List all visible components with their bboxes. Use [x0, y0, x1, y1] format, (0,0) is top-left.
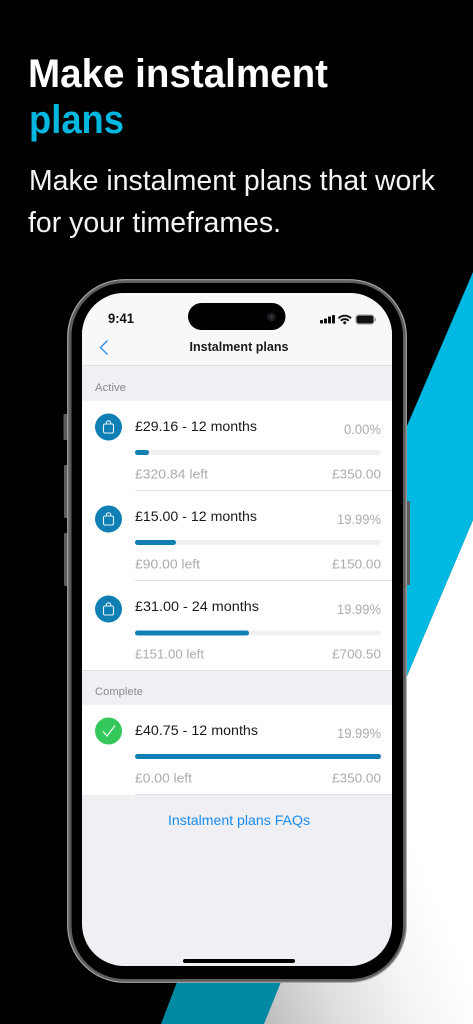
plan row 2: £15.00 - 12 months — [135, 509, 257, 524]
plan row 3: 19.99% — [337, 602, 381, 617]
plan row 3 — [95, 596, 381, 662]
background: blue diagonal band — [407, 272, 473, 676]
plan row 2 — [95, 506, 392, 581]
title: Make instalment — [28, 52, 328, 96]
subtitle: Make instalment plans that work — [29, 165, 435, 197]
phone bezel — [72, 283, 403, 979]
section label: complete: Complete — [95, 686, 143, 698]
title — [28, 52, 328, 142]
complete plan row: £350.00 — [332, 770, 381, 786]
home indicator — [183, 959, 295, 963]
dynamic island — [188, 303, 286, 330]
plan row 3: £151.00 left — [135, 646, 204, 662]
status time: 9:41 — [108, 311, 134, 326]
plan row 3: £31.00 - 24 months — [135, 599, 259, 614]
plan row 2: 19.99% — [337, 512, 381, 527]
plan row 1: 0.00% — [344, 422, 381, 437]
phone side buttons — [64, 414, 410, 586]
panel: complete plans list — [82, 705, 392, 795]
background: white corner with shadow — [260, 520, 473, 1024]
status icons — [320, 315, 376, 324]
title: plans — [29, 98, 124, 142]
FAQ link: Instalment plans FAQs — [168, 812, 310, 828]
complete plan row: £0.00 left — [135, 770, 192, 786]
navigation bar background — [82, 293, 392, 365]
plan row 2: £90.00 left — [135, 556, 200, 572]
section divider — [82, 670, 392, 671]
phone metal frame — [68, 280, 406, 982]
screen title: Instalment plans — [190, 339, 288, 354]
complete plan row — [95, 718, 392, 795]
back chevron — [100, 340, 108, 354]
subtitle: for your timeframes. — [28, 207, 281, 239]
plan row 2: £150.00 — [332, 556, 381, 572]
complete plan row: 19.99% — [337, 726, 381, 741]
section label: active: Active — [95, 382, 126, 394]
nav divider — [82, 365, 392, 366]
phone screen — [82, 293, 392, 966]
plan row 1: £350.00 — [332, 466, 381, 482]
plan row 1: £29.16 - 12 months — [135, 419, 257, 434]
complete plan row: £40.75 - 12 months — [135, 723, 258, 738]
plan row 1: £320.84 left — [135, 466, 208, 482]
subtitle — [28, 165, 435, 239]
phone — [64, 280, 410, 982]
plan row 3: £700.50 — [332, 646, 381, 662]
plan row 1 — [95, 414, 392, 491]
panel: active plans list — [82, 401, 392, 670]
background: dark teal band below phone — [161, 982, 281, 1024]
